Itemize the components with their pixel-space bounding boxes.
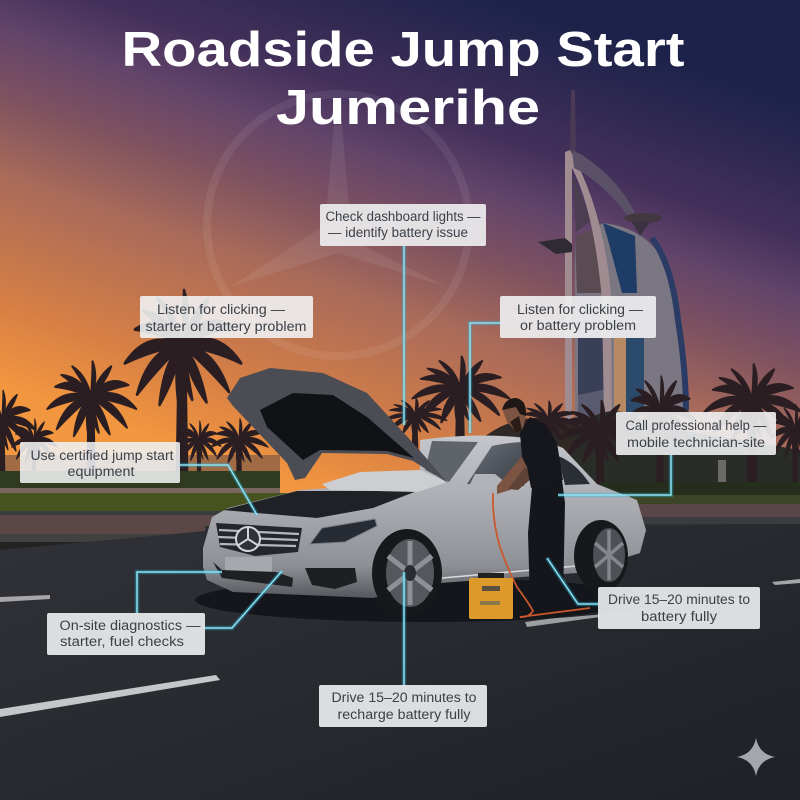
car body	[203, 436, 646, 598]
rear wheel	[574, 520, 628, 592]
callout: listen for clicking, right	[500, 296, 656, 338]
hood underside	[260, 393, 414, 460]
callout: call professional help	[616, 412, 776, 455]
background palms	[0, 290, 800, 500]
callout: on-site diagnostics: starter, fuel checks	[60, 634, 184, 649]
callout: certified equipment: equipment	[68, 464, 135, 479]
head	[503, 402, 526, 430]
callout: drive, bottom: recharge battery fully	[338, 707, 471, 722]
callout: certified equipment	[20, 442, 180, 483]
callout: check dashboard lights: Check dashboard lights —	[326, 209, 481, 224]
road	[0, 524, 800, 800]
callout: check dashboard lights: — identify battery issue	[328, 225, 468, 240]
callout: drive, bottom: Drive 15–20 minutes to	[332, 690, 476, 705]
callout: listen for clicking, left	[140, 296, 313, 338]
callout: on-site diagnostics: On-site diagnostics —	[60, 618, 201, 633]
callout: listen for clicking, right: Listen for clicking —	[517, 302, 644, 317]
wing mirror	[468, 474, 505, 489]
headlight	[310, 519, 377, 544]
callout: drive, right: Drive 15–20 minutes to	[608, 592, 750, 607]
landmark: sail tower	[538, 90, 687, 420]
watermark: star emblem	[207, 94, 469, 356]
title: Jumerihe	[276, 81, 540, 135]
callout: call professional help: Call professional help —	[626, 418, 767, 433]
background tree mass and buildings	[0, 411, 800, 490]
callout: listen for clicking, right: or battery problem	[520, 318, 636, 333]
callout: listen for clicking, left: starter or battery problem	[146, 319, 306, 334]
callout: certified equipment: Use certified jump start	[30, 448, 174, 463]
callout: drive, right	[598, 587, 760, 629]
arms	[497, 456, 530, 494]
open hood	[227, 368, 448, 483]
callout: call professional help: mobile technician-site	[627, 435, 765, 450]
engine bay	[223, 491, 417, 518]
trousers and shoes	[520, 480, 566, 615]
technician	[497, 398, 566, 615]
jump starter unit	[469, 573, 513, 619]
grille	[216, 523, 302, 556]
chrome sill	[442, 566, 577, 578]
horizon: hedges and lawn	[0, 471, 800, 542]
shirt	[520, 417, 563, 488]
car	[195, 368, 655, 622]
front wheel	[372, 529, 442, 617]
title	[122, 23, 684, 135]
title: Roadside Jump Start	[122, 23, 684, 77]
number plate	[225, 557, 272, 573]
background: sunset sky	[0, 0, 800, 530]
car shadow	[195, 578, 655, 622]
callout: drive, right: battery fully	[641, 609, 717, 624]
callout: on-site diagnostics	[47, 613, 205, 655]
callout: listen for clicking, left: Listen for clicking —	[157, 302, 286, 317]
icon: sparkle	[737, 738, 775, 776]
windshield	[322, 470, 447, 492]
road markings	[0, 579, 800, 717]
callout: check dashboard lights	[320, 204, 486, 246]
charger cable	[493, 493, 590, 617]
connector lines	[137, 246, 671, 685]
callout: drive, bottom	[319, 685, 487, 727]
side windows	[467, 442, 524, 486]
lower bumper intake	[213, 562, 293, 587]
